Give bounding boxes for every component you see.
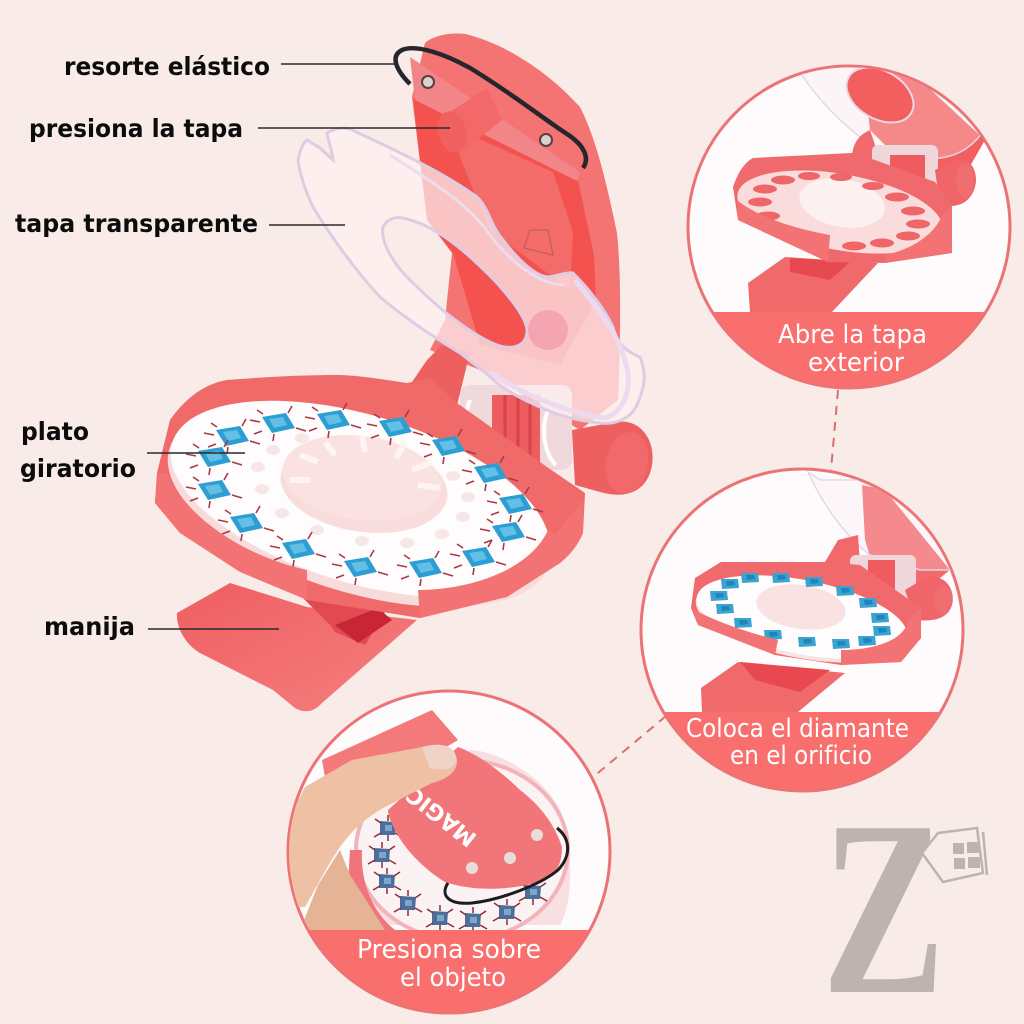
callout: plato giratorio: plato <box>21 417 89 446</box>
caption band <box>665 712 939 790</box>
connector arrow: step 1 to step 2 <box>831 390 838 470</box>
hinge <box>410 345 653 497</box>
panel: step 2 place diamond <box>640 469 970 802</box>
step 2 caption: Coloca el diamante <box>686 714 909 744</box>
icon: step 2 device <box>689 472 960 712</box>
panel: step 1 open lid <box>686 64 1012 390</box>
transparent lid <box>298 128 644 423</box>
spring plate <box>410 57 580 181</box>
press button <box>433 88 502 156</box>
fingers <box>300 850 385 930</box>
step 3 caption: Presiona sobre <box>357 935 541 965</box>
device lettering: MAGIC <box>402 781 482 851</box>
base tray <box>155 375 585 618</box>
thumbnail <box>422 745 456 770</box>
icon: step 1 device <box>731 56 990 312</box>
panel: step 1 open lid: exterior <box>808 348 904 378</box>
upper body of device <box>412 33 620 430</box>
panel: step 3 press on object: el objeto <box>400 963 506 993</box>
handle <box>177 583 417 711</box>
connector arrow: step 2 to step 3 <box>592 716 666 778</box>
icons: blue diamonds <box>186 403 543 586</box>
callout: resorte elástico: resorte elástico <box>64 52 270 81</box>
rotating plate <box>144 362 576 647</box>
product: main applicator illustration <box>144 33 653 711</box>
caption band <box>714 312 984 387</box>
caption band <box>310 930 588 1012</box>
callout: plato giratorio: giratorio <box>20 454 136 483</box>
turntable hub <box>274 425 454 543</box>
callout: tapa transparente: tapa transparente <box>15 209 258 238</box>
panel: step 2 place diamond: en el orificio <box>730 741 872 771</box>
hand <box>286 745 457 907</box>
small droplets <box>251 433 475 548</box>
callout: presiona la tapa: presiona la tapa <box>29 114 243 143</box>
front tabs of tray <box>155 473 307 600</box>
icon: step 3 device <box>286 710 570 940</box>
elastic spring <box>396 48 586 168</box>
callout: manija: manija <box>44 612 135 641</box>
callout: plato giratorio <box>20 417 245 483</box>
panel: step 3 press on object <box>285 691 615 1020</box>
step 1 caption: Abre la tapa <box>778 320 927 350</box>
